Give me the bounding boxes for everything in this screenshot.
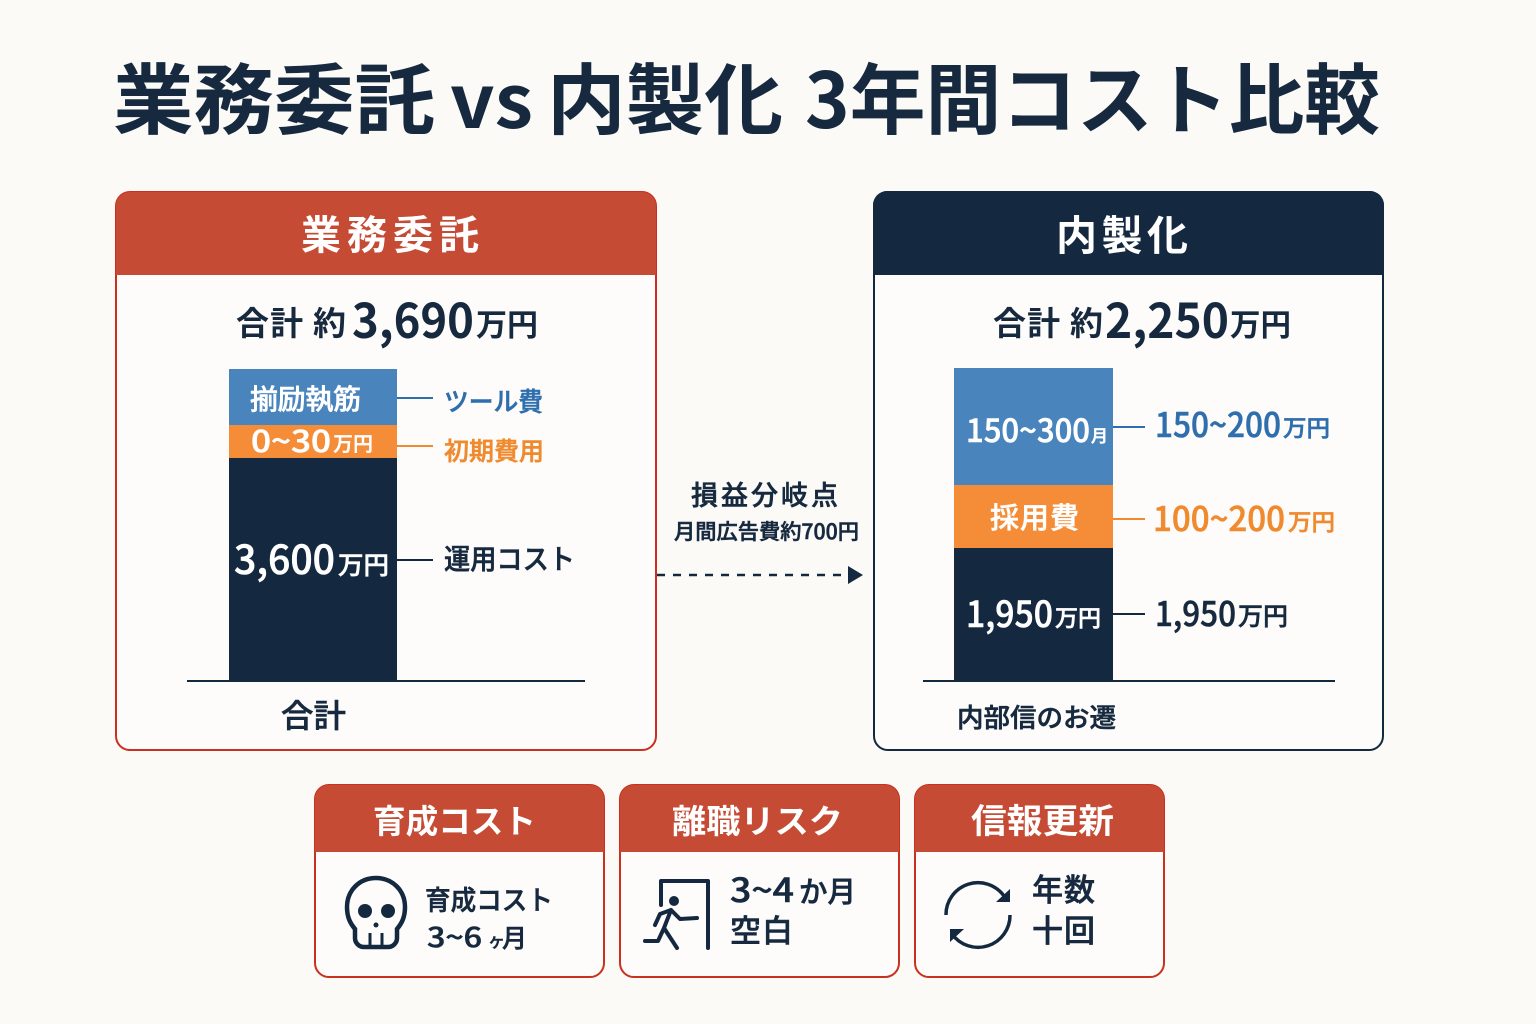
total: 約3,690万円: 3,690 bbox=[352, 282, 474, 352]
legend: 1,950万円: 万円 bbox=[1238, 597, 1288, 633]
panel header: 内製化: 内製化 bbox=[1056, 202, 1188, 262]
icon: skull bbox=[347, 878, 405, 947]
callout: 損益分岐点: 月間広告費約700円 bbox=[674, 516, 859, 546]
stacked bar: 業務委託: 万円 bbox=[338, 546, 389, 582]
legend: 初期費用: 初期費用 bbox=[444, 432, 544, 468]
callout: 損益分岐点: 損益分岐点 bbox=[691, 474, 838, 513]
title bbox=[113, 40, 1380, 151]
arrow bbox=[657, 566, 863, 584]
panel header: 業務委託 bbox=[116, 192, 656, 275]
card: 離職リスク bbox=[620, 785, 899, 977]
card header: 育成コスト bbox=[373, 795, 536, 843]
icon: refresh bbox=[946, 883, 1010, 947]
card text bbox=[730, 864, 856, 951]
card text: 3~4 bbox=[730, 864, 794, 912]
icon: exit bbox=[645, 881, 708, 948]
card text: 育成コスト bbox=[425, 879, 553, 918]
stacked bar: 内製化: 万円 bbox=[1055, 599, 1101, 633]
card header bbox=[315, 785, 604, 852]
stacked bar: 業務委託: 万円 bbox=[333, 428, 373, 457]
card header: 信報更新 bbox=[971, 794, 1114, 843]
total: 約3,690万円 bbox=[236, 282, 538, 352]
panel: 内製化 bbox=[873, 191, 1384, 750]
card: 育成コスト bbox=[315, 785, 604, 977]
stacked bar: 業務委託: 3,600 bbox=[234, 528, 335, 586]
stacked bar: 内製化: 1,950 bbox=[966, 586, 1053, 638]
stacked bar: 内製化: 月 bbox=[1091, 422, 1108, 447]
card text: 空白 bbox=[730, 906, 793, 951]
legend: 150~200万円 bbox=[1113, 398, 1330, 447]
title: 業務委託 bbox=[113, 40, 435, 151]
panel header: 業務委託: 業務委託 bbox=[301, 203, 479, 261]
callout: 損益分岐点 bbox=[657, 474, 863, 584]
card text: 十回 bbox=[1032, 906, 1095, 951]
card text: ヶ bbox=[488, 927, 505, 952]
card header: 離職リスク bbox=[672, 795, 843, 843]
stacked bar: 業務委託: 0~30 bbox=[251, 417, 331, 461]
axis label: 内部信のお遷: 内部信のお遷 bbox=[957, 698, 1116, 735]
stacked bar: 内製化 bbox=[954, 368, 1113, 681]
total: 約3,690万円: 万円 bbox=[476, 300, 538, 345]
total: 約2,250万円: 合計 約 bbox=[993, 297, 1103, 345]
legend: 150~200万円: 万円 bbox=[1283, 409, 1330, 443]
legend: 1,950万円: 1,950 bbox=[1155, 587, 1236, 636]
stacked bar: 内製化: 150~300 bbox=[966, 406, 1090, 452]
stacked bar: 業務委託 bbox=[229, 369, 397, 681]
legend: 100~200万円: 100~200 bbox=[1153, 492, 1285, 541]
card: 信報更新 bbox=[915, 785, 1164, 977]
card text: 3~6 bbox=[427, 916, 482, 955]
panel header: 内製化 bbox=[873, 191, 1384, 275]
total: 約2,250万円: 2,250 bbox=[1105, 282, 1229, 352]
stacked bar: 内製化: 採用費 bbox=[990, 495, 1079, 537]
axis label: 合計: 合計 bbox=[281, 691, 346, 737]
total: 約2,250万円: 万円 bbox=[1230, 300, 1291, 345]
card header bbox=[620, 785, 899, 852]
title: vs bbox=[450, 43, 533, 150]
card text: 月 bbox=[502, 919, 527, 955]
card text: 年数 bbox=[1032, 865, 1095, 910]
panel: 業務委託 bbox=[116, 192, 656, 750]
legend: 150~200万円: 150~200 bbox=[1155, 398, 1281, 447]
stacked bar: 業務委託: 揃励執筋 bbox=[250, 378, 361, 418]
card text bbox=[1032, 865, 1095, 951]
title: 3年間コスト比較 bbox=[805, 40, 1380, 151]
legend: 100~200万円 bbox=[1113, 492, 1335, 541]
card header bbox=[915, 785, 1164, 852]
total: 約2,250万円 bbox=[993, 282, 1291, 352]
legend: ツール費: ツール費 bbox=[444, 382, 543, 419]
card text: か月 bbox=[799, 869, 856, 911]
title: 内製化 bbox=[547, 40, 783, 151]
card text bbox=[425, 879, 553, 955]
total: 約3,690万円: 合計 約 bbox=[236, 297, 346, 345]
legend: 100~200万円: 万円 bbox=[1288, 503, 1335, 537]
legend: 1,950万円 bbox=[1113, 587, 1288, 636]
legend: 運用コスト: 運用コスト bbox=[444, 538, 575, 578]
